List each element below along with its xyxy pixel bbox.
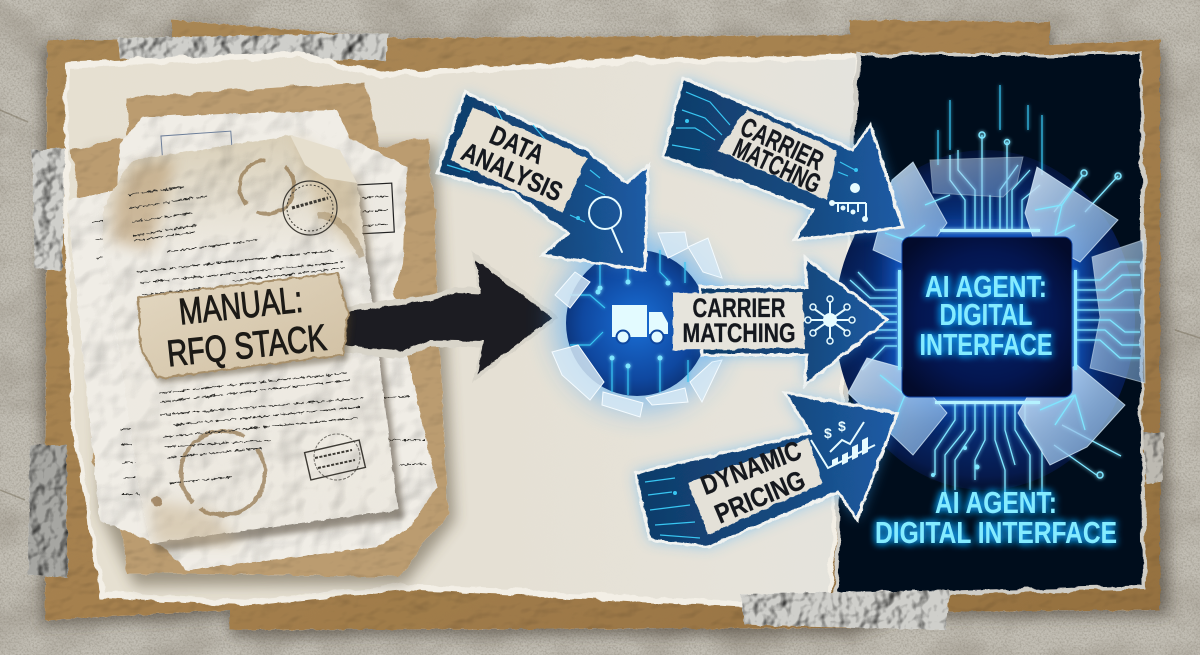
kraft folders behind stack <box>70 82 455 586</box>
chip frame <box>898 229 1077 404</box>
broken glass ring fragments <box>552 232 722 417</box>
handwriting lines <box>128 187 363 483</box>
chip title: DIGITAL <box>940 297 1032 332</box>
label: Dynamic Pricing: DYNAMIC <box>697 435 805 501</box>
label: Data Analysis <box>450 107 587 213</box>
arrow: Dynamic Pricing <box>635 393 897 547</box>
label: Dynamic Pricing: PRICING <box>710 465 810 529</box>
label: Data Analysis: ANALYSIS <box>457 137 567 207</box>
icon: price chart: $ <box>824 425 832 441</box>
neon traces over shards <box>880 175 1140 430</box>
label: Manual RFQ Stack <box>138 273 352 383</box>
silver foil strip at bottom edge <box>740 590 950 630</box>
AI chip interface <box>848 85 1145 500</box>
arrow: Carrier Matching (upper) <box>663 78 903 240</box>
arrow: dark torn paper arrow from stack to hub <box>343 251 559 383</box>
hub circuit traces <box>570 250 688 395</box>
curled page corner <box>290 135 357 183</box>
dark digital panel <box>833 53 1146 598</box>
arrow: Data Analysis <box>437 92 648 270</box>
label: Carrier Matching: MATCHNG <box>729 133 825 199</box>
white loose sheets <box>67 110 437 570</box>
arrow circuit traces <box>672 92 858 176</box>
label: Carrier Matching: CARRIER <box>692 293 786 323</box>
label: Dynamic Pricing <box>688 435 823 535</box>
coffee ring stains <box>152 160 362 515</box>
circuit traces around chip <box>850 85 1121 500</box>
paper stack: manual RFQ documents <box>67 82 455 586</box>
ink stamps <box>283 181 365 480</box>
caption: AI Agent Digital Interface: DIGITAL INTERFACE <box>875 515 1117 550</box>
hub: central circuit disc with truck <box>552 232 726 417</box>
chip title <box>920 269 1052 362</box>
label: Manual RFQ Stack: MANUAL: <box>177 279 304 332</box>
chip title: AI AGENT: <box>925 269 1047 304</box>
icon: price chart <box>811 418 875 468</box>
icon: magnifying glass <box>589 197 622 252</box>
label: Carrier Matching <box>673 292 805 350</box>
top crumpled sheet <box>103 135 404 552</box>
icon: network hub <box>805 296 855 344</box>
label: Carrier Matching: MATCHING <box>682 318 796 348</box>
label: Carrier Matching <box>717 110 837 200</box>
arrow: Carrier Matching (centre) <box>673 257 887 385</box>
arrow circuit traces <box>645 478 700 538</box>
label: Data Analysis: DATA <box>485 120 549 170</box>
silver foil tape pieces <box>28 33 1164 578</box>
label: Manual RFQ Stack: RFQ STACK <box>165 317 329 374</box>
label: Carrier Matching: CARRIER <box>736 112 828 176</box>
icon: delivery truck <box>612 305 668 344</box>
icon: carrier network <box>829 183 868 222</box>
arrow circuit traces <box>447 106 605 222</box>
caption: AI Agent Digital Interface: AI AGENT: <box>935 485 1057 520</box>
chip title: INTERFACE <box>920 327 1052 362</box>
torn cream paper sheet <box>64 52 860 612</box>
caption: AI Agent Digital Interface <box>875 485 1117 550</box>
icon: price chart: $ <box>838 418 846 434</box>
glass shards <box>848 157 1145 465</box>
